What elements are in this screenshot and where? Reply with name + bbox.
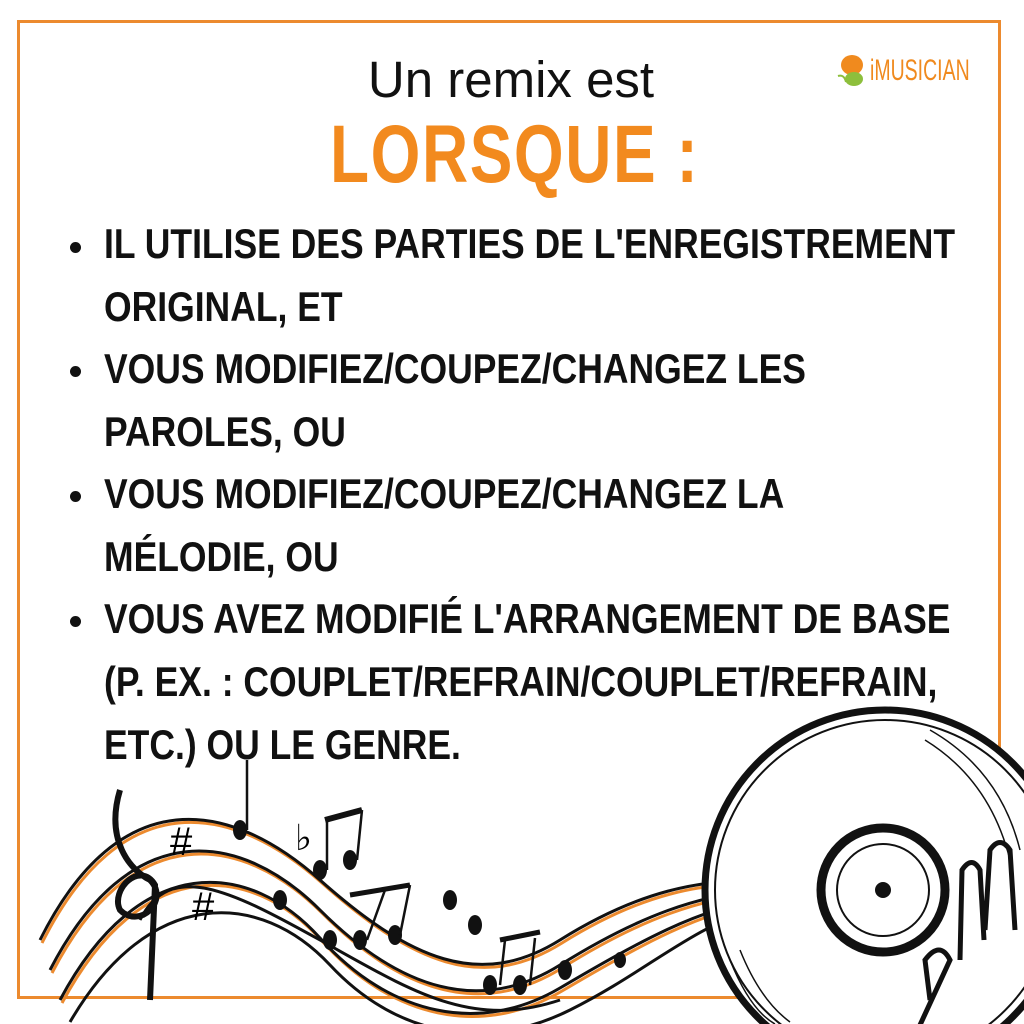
illustration: music staff and vinyl: ♭ (295, 817, 312, 858)
illustration: music staff and vinyl (38, 706, 1024, 1024)
bullet list: MÉLODIE, OU (104, 533, 339, 580)
illustration: music staff and vinyl: # (170, 820, 193, 864)
logo: iMusician: iMUSICIAN (870, 54, 970, 87)
bullet list: VOUS AVEZ MODIFIÉ L'ARRANGEMENT DE BASE (104, 595, 950, 642)
bullet list: ETC.) OU LE GENRE. (104, 721, 461, 768)
bullet list: PAROLES, OU (104, 408, 346, 455)
illustration: music staff and vinyl: # (192, 885, 215, 929)
title line: Un remix est (368, 51, 654, 108)
title emphasis: LORSQUE : (330, 109, 699, 200)
bullet list: VOUS MODIFIEZ/COUPEZ/CHANGEZ LES (104, 345, 806, 392)
bullet list: ORIGINAL, ET (104, 283, 343, 330)
bullet list (70, 220, 955, 768)
bullet list: (P. EX. : COUPLET/REFRAIN/COUPLET/REFRAIN, (104, 658, 937, 705)
bullet list: IL UTILISE DES PARTIES DE L'ENREGISTREMENT (104, 220, 955, 267)
bullet list: VOUS MODIFIEZ/COUPEZ/CHANGEZ LA (104, 470, 784, 517)
